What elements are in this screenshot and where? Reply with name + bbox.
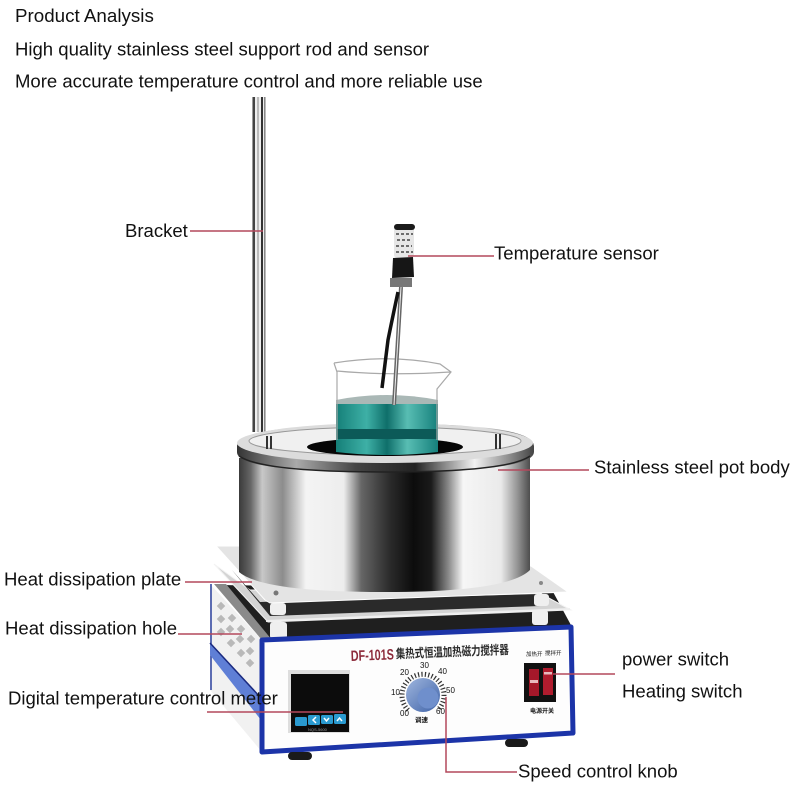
heading: product analysis: Product Analysis: [15, 5, 154, 26]
speed dial: 50: [446, 686, 455, 695]
label: digital temperature control meter: Digital temperature control meter: [8, 688, 278, 708]
label: bracket: Bracket: [125, 220, 189, 241]
panel title: [351, 642, 509, 665]
heading: product analysis: [15, 5, 483, 92]
speed dial: 40: [438, 667, 447, 676]
label: heating switch: Heating switch: [622, 680, 743, 702]
speed dial: 60: [436, 707, 445, 716]
product: magnetic stirrer: [210, 97, 573, 760]
digital temperature control meter: NQS-5600: [308, 727, 328, 732]
label: heat dissipation hole: Heat dissipation hole: [5, 618, 177, 638]
speed dial: [391, 661, 455, 724]
feet: [288, 739, 528, 760]
heading: product analysis: High quality stainless steel support rod and sensor: [15, 38, 429, 60]
heat dissipation holes: [217, 602, 255, 667]
upper heat dissipation plate: [216, 546, 568, 603]
temperature sensor: [382, 224, 415, 405]
front panel: [262, 627, 573, 752]
power and heating switches: 加热开: [526, 650, 543, 658]
icon: support rod: [252, 97, 266, 432]
base top (dark gap): [218, 585, 572, 640]
power and heating switches: 电源开关: [530, 707, 554, 715]
label: stainless steel pot body: Stainless steel pot body: [594, 456, 790, 478]
stainless steel pot body: [237, 423, 534, 592]
beaker with teal liquid: [334, 359, 451, 455]
panel title: DF-101S: [351, 646, 394, 665]
callout lines: [178, 231, 615, 772]
label: heat dissipation plate: Heat dissipation plate: [4, 568, 181, 590]
digital temperature control meter: [288, 670, 350, 733]
plate standoffs: [270, 594, 549, 639]
lower plate: [214, 564, 571, 622]
speed dial: 30: [420, 661, 429, 670]
label: power switch: power switch: [622, 648, 729, 670]
power and heating switches: 搅拌开: [545, 649, 562, 657]
base side panel: [210, 584, 262, 752]
speed dial: 00: [400, 709, 409, 718]
speed dial: 调速: [415, 715, 428, 724]
heading: product analysis: More accurate temperature control and more reliable use: [15, 70, 483, 92]
label: speed control knob: Speed control knob: [518, 760, 678, 782]
panel title: 集热式恒温加热磁力搅拌器: [396, 642, 509, 661]
power and heating switches: [524, 649, 562, 715]
label: temperature sensor: Temperature sensor: [494, 242, 659, 264]
speed dial: 20: [400, 668, 409, 677]
speed dial: 10: [391, 688, 400, 697]
